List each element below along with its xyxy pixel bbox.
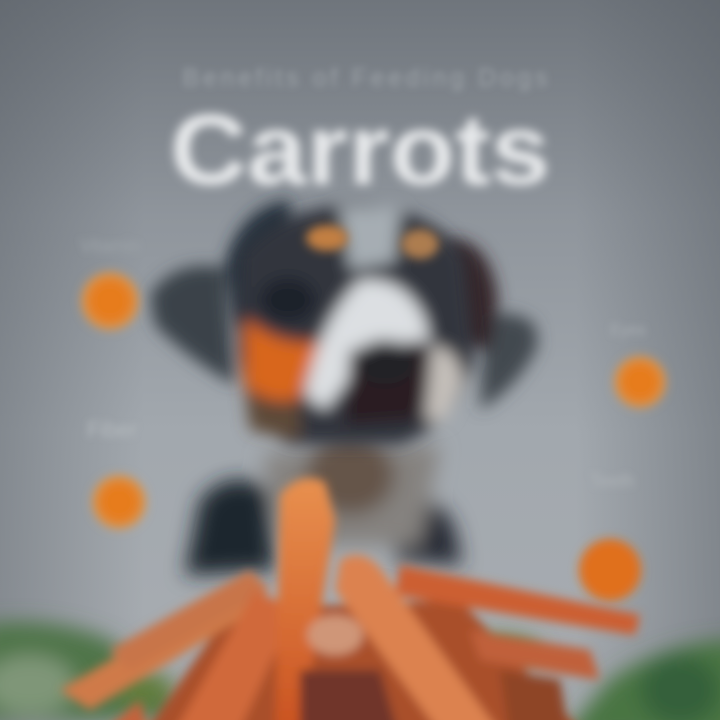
marker: upper left xyxy=(80,236,140,330)
marker: upper left: Vitamin xyxy=(80,236,140,256)
marker: lower left: Fiber xyxy=(87,417,137,442)
marker: upper right xyxy=(610,322,666,408)
carrot pile base xyxy=(140,600,590,720)
greens xyxy=(0,622,720,720)
marker: upper right: Eyes xyxy=(610,322,646,339)
dog body xyxy=(185,435,462,575)
marker: lower left xyxy=(87,417,146,529)
dog eyebrows xyxy=(306,225,439,259)
subtitle: Benefits of Feeding Dogs xyxy=(182,64,548,92)
marker: lower right: Teeth xyxy=(590,471,634,491)
carrots xyxy=(60,478,640,720)
title: Carrots xyxy=(170,94,550,206)
dog ears xyxy=(150,200,538,410)
marker: lower right xyxy=(579,471,641,601)
dog head xyxy=(236,205,475,445)
benefit markers xyxy=(80,236,666,601)
dog illustration xyxy=(150,200,538,575)
